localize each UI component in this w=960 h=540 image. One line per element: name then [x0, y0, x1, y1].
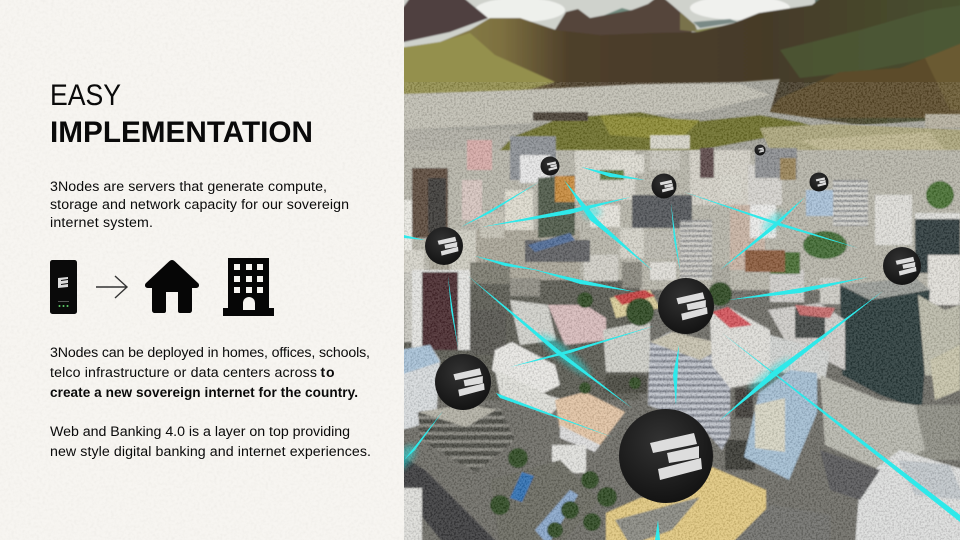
node: far 4	[810, 172, 828, 192]
text block: web and banking layer	[50, 424, 371, 460]
small background buildings	[404, 135, 840, 470]
city blocks	[400, 135, 960, 540]
title: IMPLEMENTATION	[50, 116, 313, 149]
image texture	[404, 82, 960, 540]
upper towers	[510, 136, 556, 180]
icon: house	[145, 260, 199, 313]
node: lower left	[435, 354, 491, 410]
text block: where nodes are deployed: telco infrastructure or data centers across	[50, 365, 317, 381]
node: far 2	[652, 174, 676, 198]
text block: where nodes are deployed: create a new sovereign internet for the country.	[50, 385, 358, 400]
town and green hill	[404, 78, 960, 151]
panel: paper background	[0, 0, 404, 540]
text block: what 3Nodes are: internet system.	[50, 215, 153, 231]
icon: arrow	[96, 276, 127, 298]
cyan network links	[388, 167, 960, 540]
text block: where nodes are deployed: 3Nodes can be deployed in homes, offices, schools,	[50, 345, 370, 361]
icon: 3Node device	[50, 260, 77, 314]
icon: office building	[223, 258, 274, 316]
middle and lower blocks	[840, 278, 930, 410]
photo: aerial city with connected nodes	[388, 0, 960, 540]
sky and mountains	[400, 0, 960, 130]
text block: what 3Nodes are: 3Nodes are servers that generate compute,	[50, 179, 327, 195]
text block: web and banking layer: new style digital banking and internet experiences.	[50, 444, 371, 460]
node: far 1	[540, 156, 560, 176]
node: mid right	[883, 247, 921, 285]
node: mid left	[425, 227, 463, 265]
text block: what 3Nodes are	[50, 179, 349, 231]
text block: where nodes are deployed	[50, 345, 370, 400]
node: centre	[658, 278, 714, 334]
text block: where nodes are deployed: to	[320, 364, 334, 380]
text block: web and banking layer: Web and Banking 4.0 is a layer on top providing	[50, 424, 350, 440]
link glows	[388, 206, 794, 475]
node: large foreground	[619, 409, 713, 503]
text block: what 3Nodes are: storage and network capacity for our sovereign	[50, 197, 349, 213]
title: EASY	[50, 79, 121, 112]
icon row: node, arrow, home, office	[50, 258, 274, 316]
node: far 3	[754, 144, 766, 156]
title	[50, 79, 313, 149]
